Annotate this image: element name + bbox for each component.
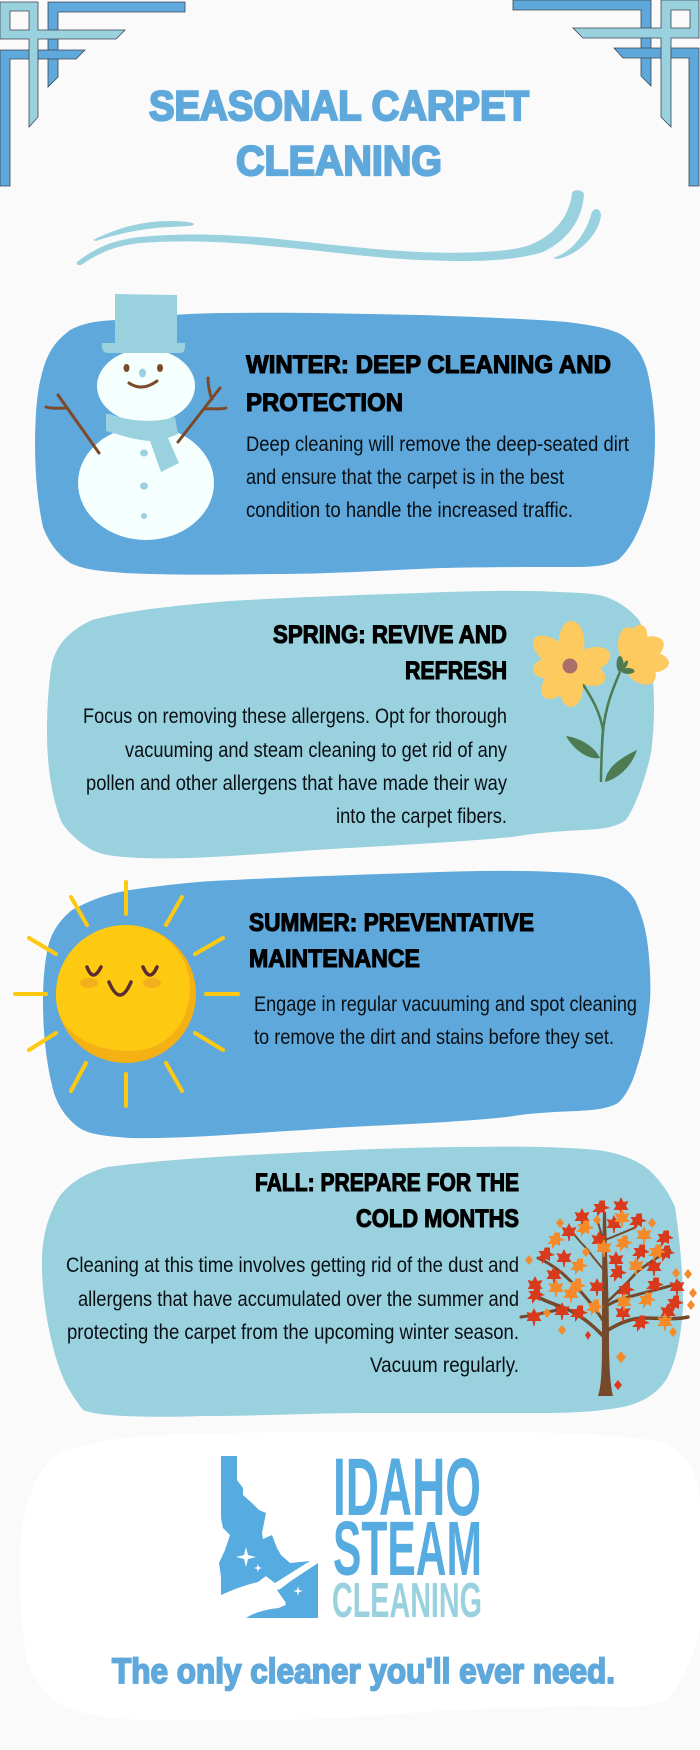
text: winter body: [246, 433, 629, 522]
text: fall body: [66, 1254, 519, 1377]
heading: summer: [249, 909, 534, 973]
panel: spring: [47, 591, 670, 858]
text: winter body: and ensure that the carpet is in the best: [246, 466, 564, 489]
text: fall body: protecting the carpet from the upcoming winter season.: [67, 1321, 519, 1344]
text: fall body: allergens that have accumulated over the summer and: [78, 1288, 519, 1311]
panel: winter: [35, 294, 655, 575]
text: fall body: Cleaning at this time involves getting rid of the dust and: [66, 1254, 519, 1277]
heading: fall: COLD MONTHS: [356, 1205, 519, 1233]
text: spring body: into the carpet fibers.: [336, 805, 507, 828]
panel background: fall: [42, 1147, 683, 1417]
text: winter body: Deep cleaning will remove the deep-seated dirt: [246, 433, 629, 456]
heading: spring: [273, 621, 507, 685]
icon: snowman: [46, 294, 226, 540]
heading: summer: SUMMER: PREVENTATIVE: [249, 909, 534, 937]
text: summer body: [254, 993, 637, 1049]
panel background: footer: [20, 1431, 700, 1721]
text: winter body: condition to handle the increased traffic.: [246, 499, 573, 522]
panel: footer: [20, 1431, 700, 1721]
icon: sun: [15, 882, 238, 1106]
logo: wordmark: CLEANING: [332, 1574, 482, 1628]
panel background: winter: [35, 313, 655, 575]
decorative swoosh: [77, 190, 601, 265]
tagline: The only cleaner you'll ever need.: [112, 1652, 615, 1691]
text: spring body: pollen and other allergens that have made their way: [86, 772, 507, 795]
panel: summer: [15, 871, 650, 1138]
text: summer body: to remove the dirt and stains before they set.: [254, 1026, 614, 1049]
text: spring body: Focus on removing these allergens. Opt for thorough: [83, 705, 507, 728]
heading: spring: SPRING: REVIVE AND: [273, 621, 507, 649]
heading: fall: [255, 1169, 519, 1233]
corner ornament: top left: [0, 2, 185, 186]
text: summer body: Engage in regular vacuuming and spot cleaning: [254, 993, 637, 1016]
text: fall body: Vacuum regularly.: [370, 1354, 519, 1377]
heading: fall: FALL: PREPARE FOR THE: [255, 1169, 519, 1197]
heading: winter: PROTECTION: [246, 389, 403, 417]
panel: fall: [42, 1147, 697, 1417]
corner ornament: top right: [513, 0, 699, 186]
heading: winter: WINTER: DEEP CLEANING AND: [246, 351, 611, 379]
icon: autumn tree: [521, 1197, 697, 1396]
logo: wordmark: IDAHO: [333, 1442, 481, 1533]
title: CLEANING: [236, 137, 442, 184]
title: SEASONAL CARPET: [149, 82, 529, 129]
text: spring body: [83, 705, 507, 828]
panel background: spring: [47, 591, 654, 858]
logo: wordmark: [332, 1442, 482, 1628]
logo: Idaho state icon: [219, 1456, 318, 1618]
heading: winter: [246, 351, 611, 417]
panel background: summer: [43, 871, 650, 1138]
title: [149, 82, 529, 184]
icon: flowers: [527, 621, 670, 782]
heading: spring: REFRESH: [405, 657, 507, 685]
logo: wordmark: STEAM: [333, 1506, 482, 1592]
text: spring body: vacuuming and steam cleaning to get rid of any: [125, 739, 507, 762]
heading: summer: MAINTENANCE: [249, 945, 420, 973]
